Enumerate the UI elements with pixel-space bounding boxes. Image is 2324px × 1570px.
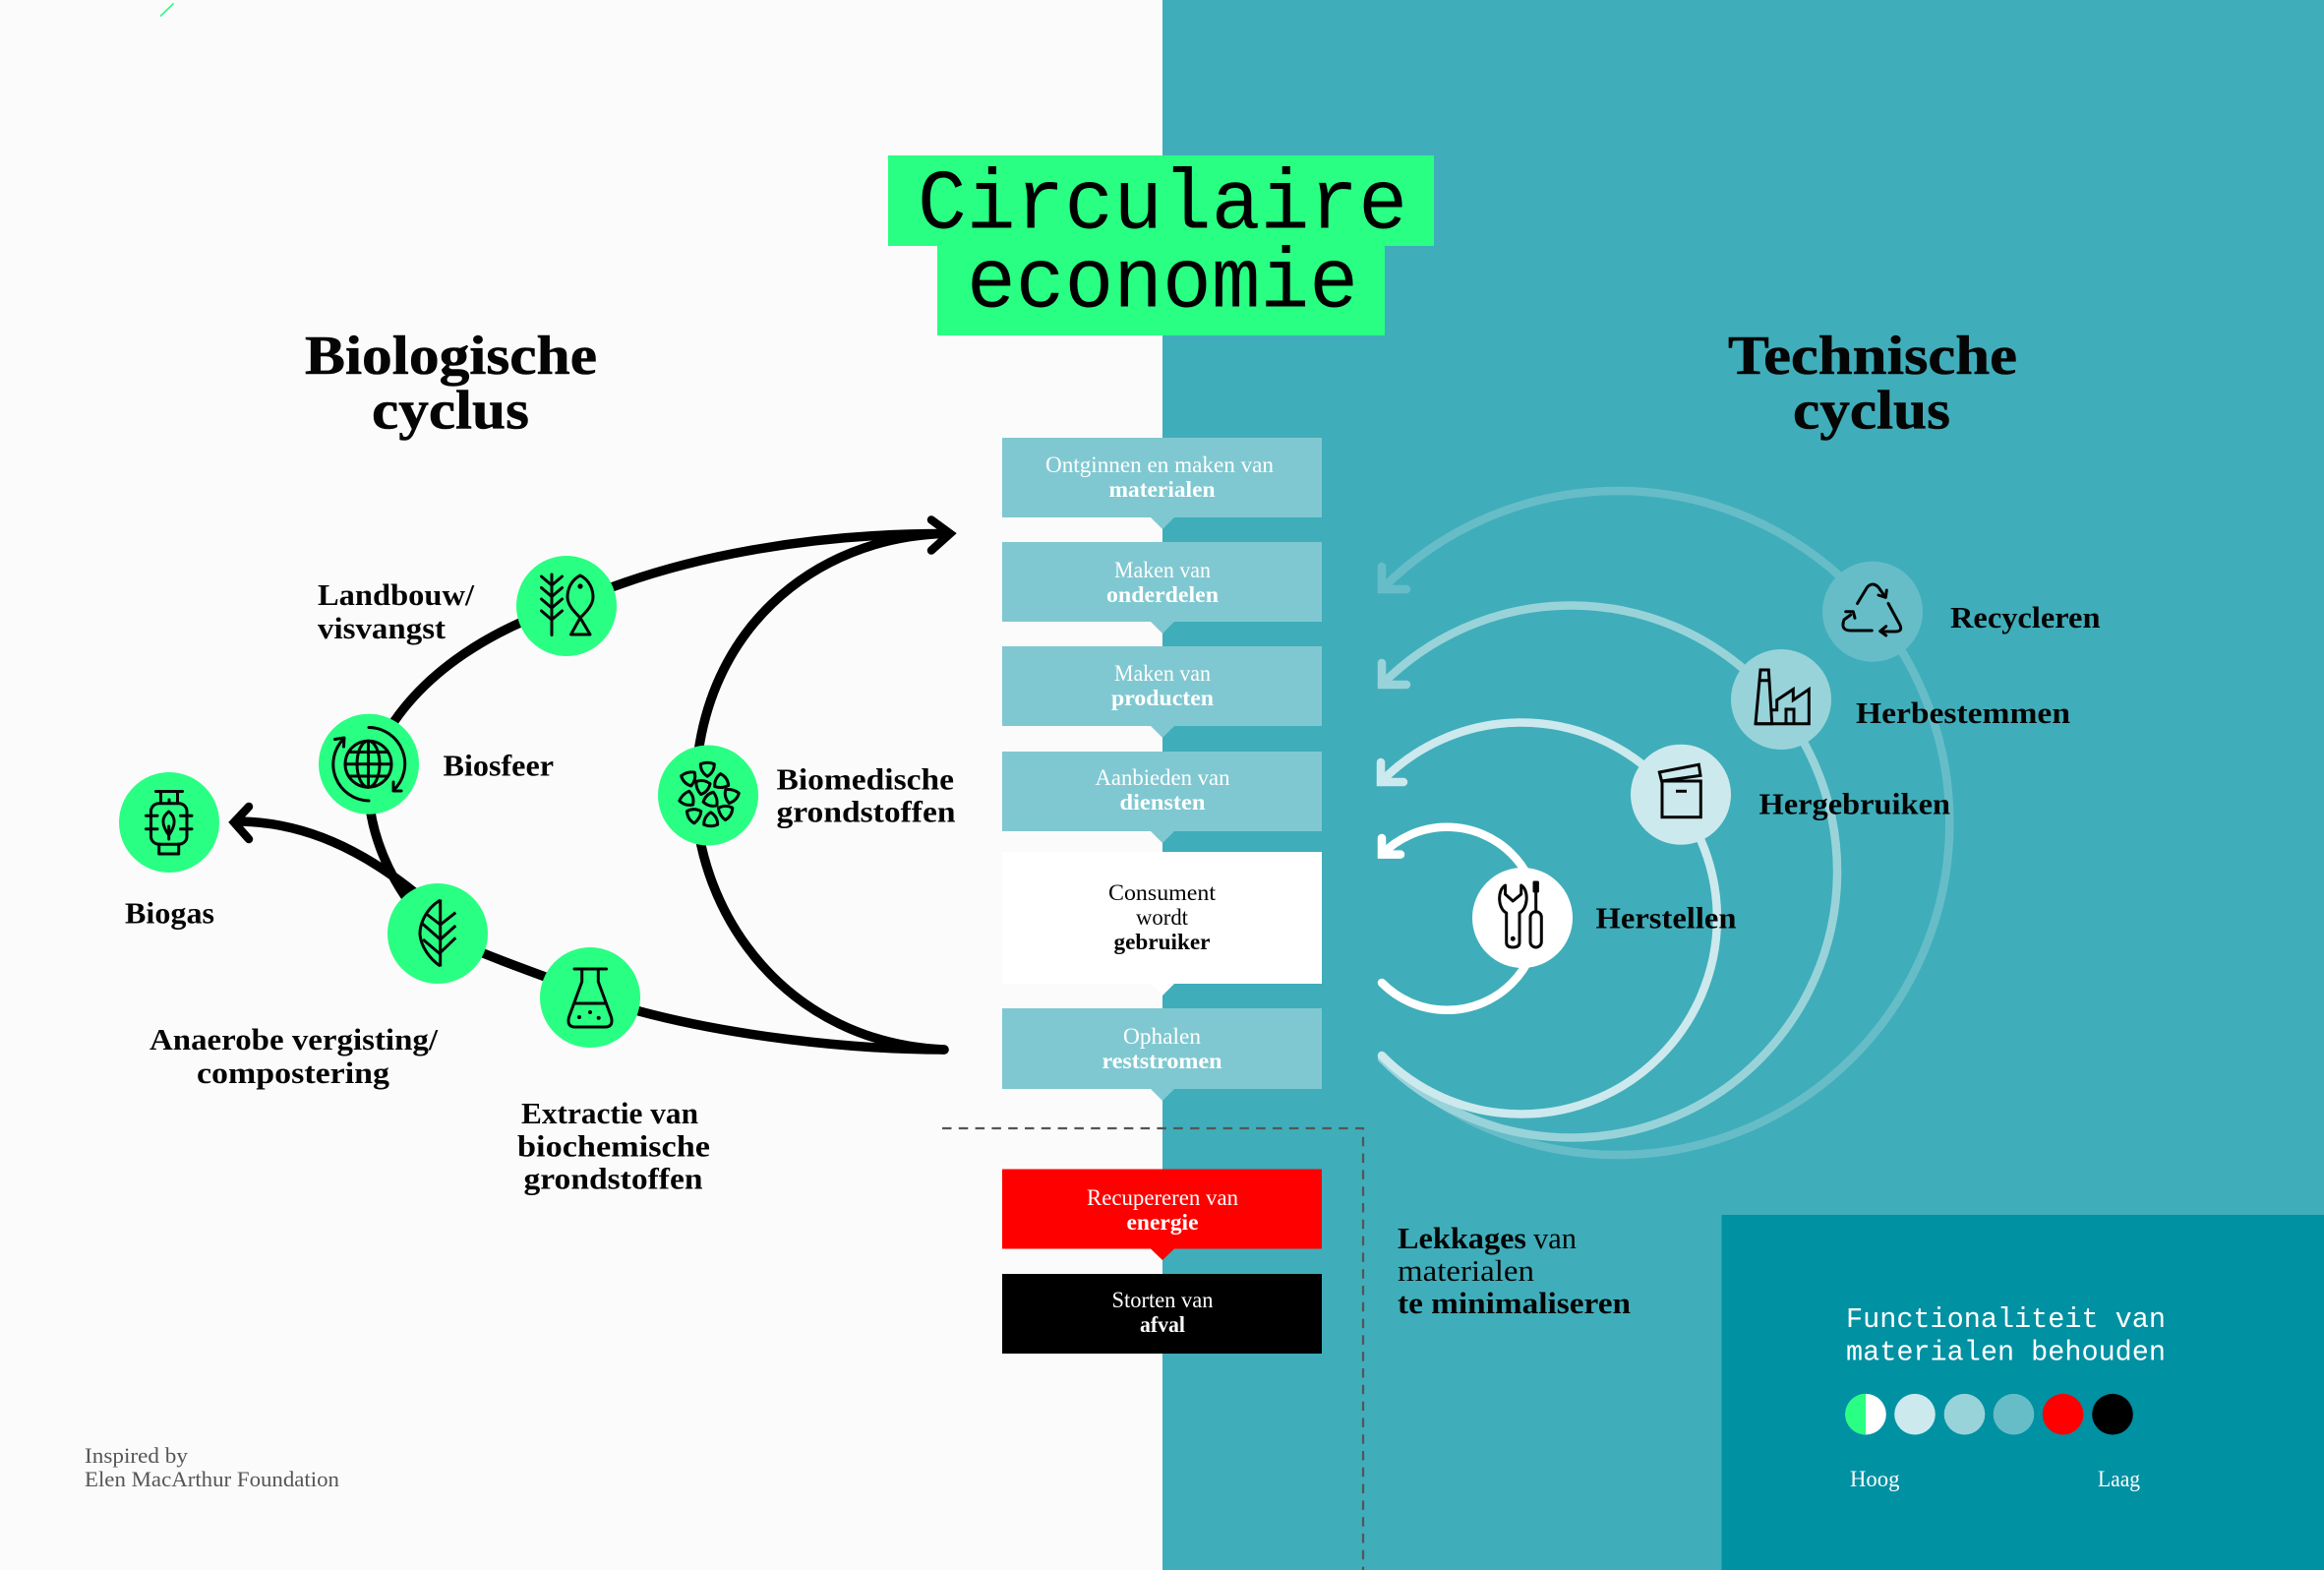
block: onderdelen: Maken van [1114, 558, 1211, 582]
legend label: hoog: Hoog [1850, 1467, 1900, 1491]
icon: globe with cycle arrows [333, 728, 405, 801]
heading: technische cyclus: cyclus [1793, 380, 1950, 441]
node: biosfeer [319, 714, 419, 815]
heading: technische cyclus: Technische [1728, 326, 2017, 387]
block: reststromen: reststromen [1102, 1049, 1222, 1073]
leakage note: Lekkages [1398, 1221, 1526, 1255]
label: landbouw / visvangst [318, 577, 474, 645]
legend label: laag: Laag [2098, 1467, 2140, 1491]
credit: Elen MacArthur Foundation [85, 1467, 339, 1491]
node: herbestemmen [1731, 649, 1831, 750]
heading: biologische cyclus [305, 326, 597, 441]
heading: biologische cyclus: cyclus [372, 380, 529, 441]
label: biomedische grondstoffen [777, 761, 956, 828]
stray green stroke [160, 4, 173, 16]
leakage note [1398, 1221, 1631, 1320]
label: biomedische grondstoffen: grondstoffen [777, 795, 956, 828]
label: extractie: grondstoffen [523, 1161, 702, 1196]
block: gebruiker: wordt [1136, 905, 1189, 930]
icon: factory [1756, 670, 1809, 724]
block: materialen: materialen [1109, 477, 1216, 502]
title: Circulaire [918, 157, 1407, 254]
icon: leaf [420, 899, 455, 966]
block: producten: producten [1111, 686, 1214, 710]
icon: wheat and fish [541, 574, 593, 635]
block: afval: afval [1140, 1312, 1185, 1337]
block: energie: energie [1127, 1210, 1198, 1235]
block: energie: Recupereren van [1087, 1185, 1238, 1210]
icon: wrench and screwdriver [1500, 882, 1541, 947]
node: biomedische grondstoffen [658, 746, 758, 846]
block: energie [1002, 1169, 1322, 1260]
block: afval: Storten van [1111, 1288, 1214, 1312]
technical cycle: recycleren arc [1382, 491, 1949, 1155]
node: herstellen [1472, 868, 1573, 968]
icon: recycle arrows [1843, 584, 1901, 635]
block: diensten: Aanbieden van [1096, 765, 1230, 790]
icon: flask [568, 969, 612, 1027]
label: recycleren: Recycleren [1950, 600, 2101, 634]
block: gebruiker: gebruiker [1113, 930, 1210, 954]
arrow: to biogas [234, 807, 249, 839]
block: materialen [1002, 438, 1322, 529]
block: onderdelen: onderdelen [1106, 582, 1219, 607]
technical cycle: herbestemmen arc [1382, 605, 1837, 1137]
background: left half [0, 0, 1162, 1570]
icon: seeds [679, 762, 740, 826]
title [888, 155, 1434, 335]
block: diensten: diensten [1119, 790, 1206, 815]
label: hergebruiken: Hergebruiken [1758, 787, 1950, 820]
node: extractie [540, 947, 640, 1048]
node: biogas [119, 772, 219, 873]
node: landbouw / visvangst [516, 556, 617, 656]
node: hergebruiken [1631, 745, 1731, 845]
block: gebruiker [1002, 852, 1322, 996]
legend title: Functionaliteit van [1846, 1304, 2166, 1336]
leakage note: materialen [1398, 1253, 1535, 1288]
credit: Inspired by [85, 1443, 188, 1468]
block: producten [1002, 646, 1322, 738]
credit [85, 1443, 339, 1491]
leakage dashed line [942, 1128, 1363, 1570]
heading: technische cyclus [1728, 326, 2017, 441]
legend title [1846, 1304, 2166, 1369]
title: economie [967, 236, 1358, 332]
label: extractie [517, 1096, 710, 1196]
technical cycle: herstellen arc [1382, 827, 1538, 1010]
leakage note: van [1533, 1221, 1577, 1255]
block: reststromen: Ophalen [1123, 1024, 1202, 1049]
label: landbouw / visvangst: Landbouw/ [318, 577, 474, 612]
label: herbestemmen: Herbestemmen [1856, 695, 2070, 730]
technical cycle: hergebruiken arc [1381, 722, 1717, 1114]
block: diensten [1002, 752, 1322, 843]
arrow: to technical flow [931, 519, 950, 551]
block: reststromen [1002, 1008, 1322, 1101]
heading: biologische cyclus: Biologische [305, 326, 597, 387]
label: biosfeer: Biosfeer [443, 748, 554, 783]
node: anaerobe vergisting [387, 883, 488, 984]
label: anaerobe vergisting: Anaerobe vergisting/ [149, 1022, 438, 1057]
label: herstellen: Herstellen [1595, 901, 1737, 935]
label: anaerobe vergisting [149, 1022, 438, 1090]
block: afval [1002, 1274, 1322, 1354]
flask bubbles [577, 1010, 601, 1020]
label: biogas: Biogas [125, 895, 214, 931]
label: extractie: biochemische [517, 1129, 710, 1163]
label: biomedische grondstoffen: Biomedische [777, 761, 954, 797]
label: extractie: Extractie van [521, 1096, 698, 1130]
icon: biogas cylinder [146, 791, 192, 854]
legend scale dots [1845, 1394, 2133, 1434]
block: materialen: Ontginnen en maken van [1045, 453, 1274, 477]
node: recycleren [1822, 562, 1923, 662]
label: anaerobe vergisting: compostering [197, 1056, 390, 1090]
fish eye [577, 583, 583, 589]
block: producten: Maken van [1114, 661, 1211, 686]
biological cycle curves [236, 533, 944, 1050]
background: right half [1162, 0, 2324, 1570]
block: gebruiker: Consument [1108, 880, 1217, 905]
legend title: materialen behouden [1846, 1338, 2166, 1369]
icon: box [1659, 764, 1700, 817]
label: landbouw / visvangst: visvangst [318, 611, 447, 645]
panel: legend [1721, 1215, 2324, 1570]
leakage note: te minimaliseren [1398, 1286, 1631, 1320]
block: onderdelen [1002, 542, 1322, 634]
